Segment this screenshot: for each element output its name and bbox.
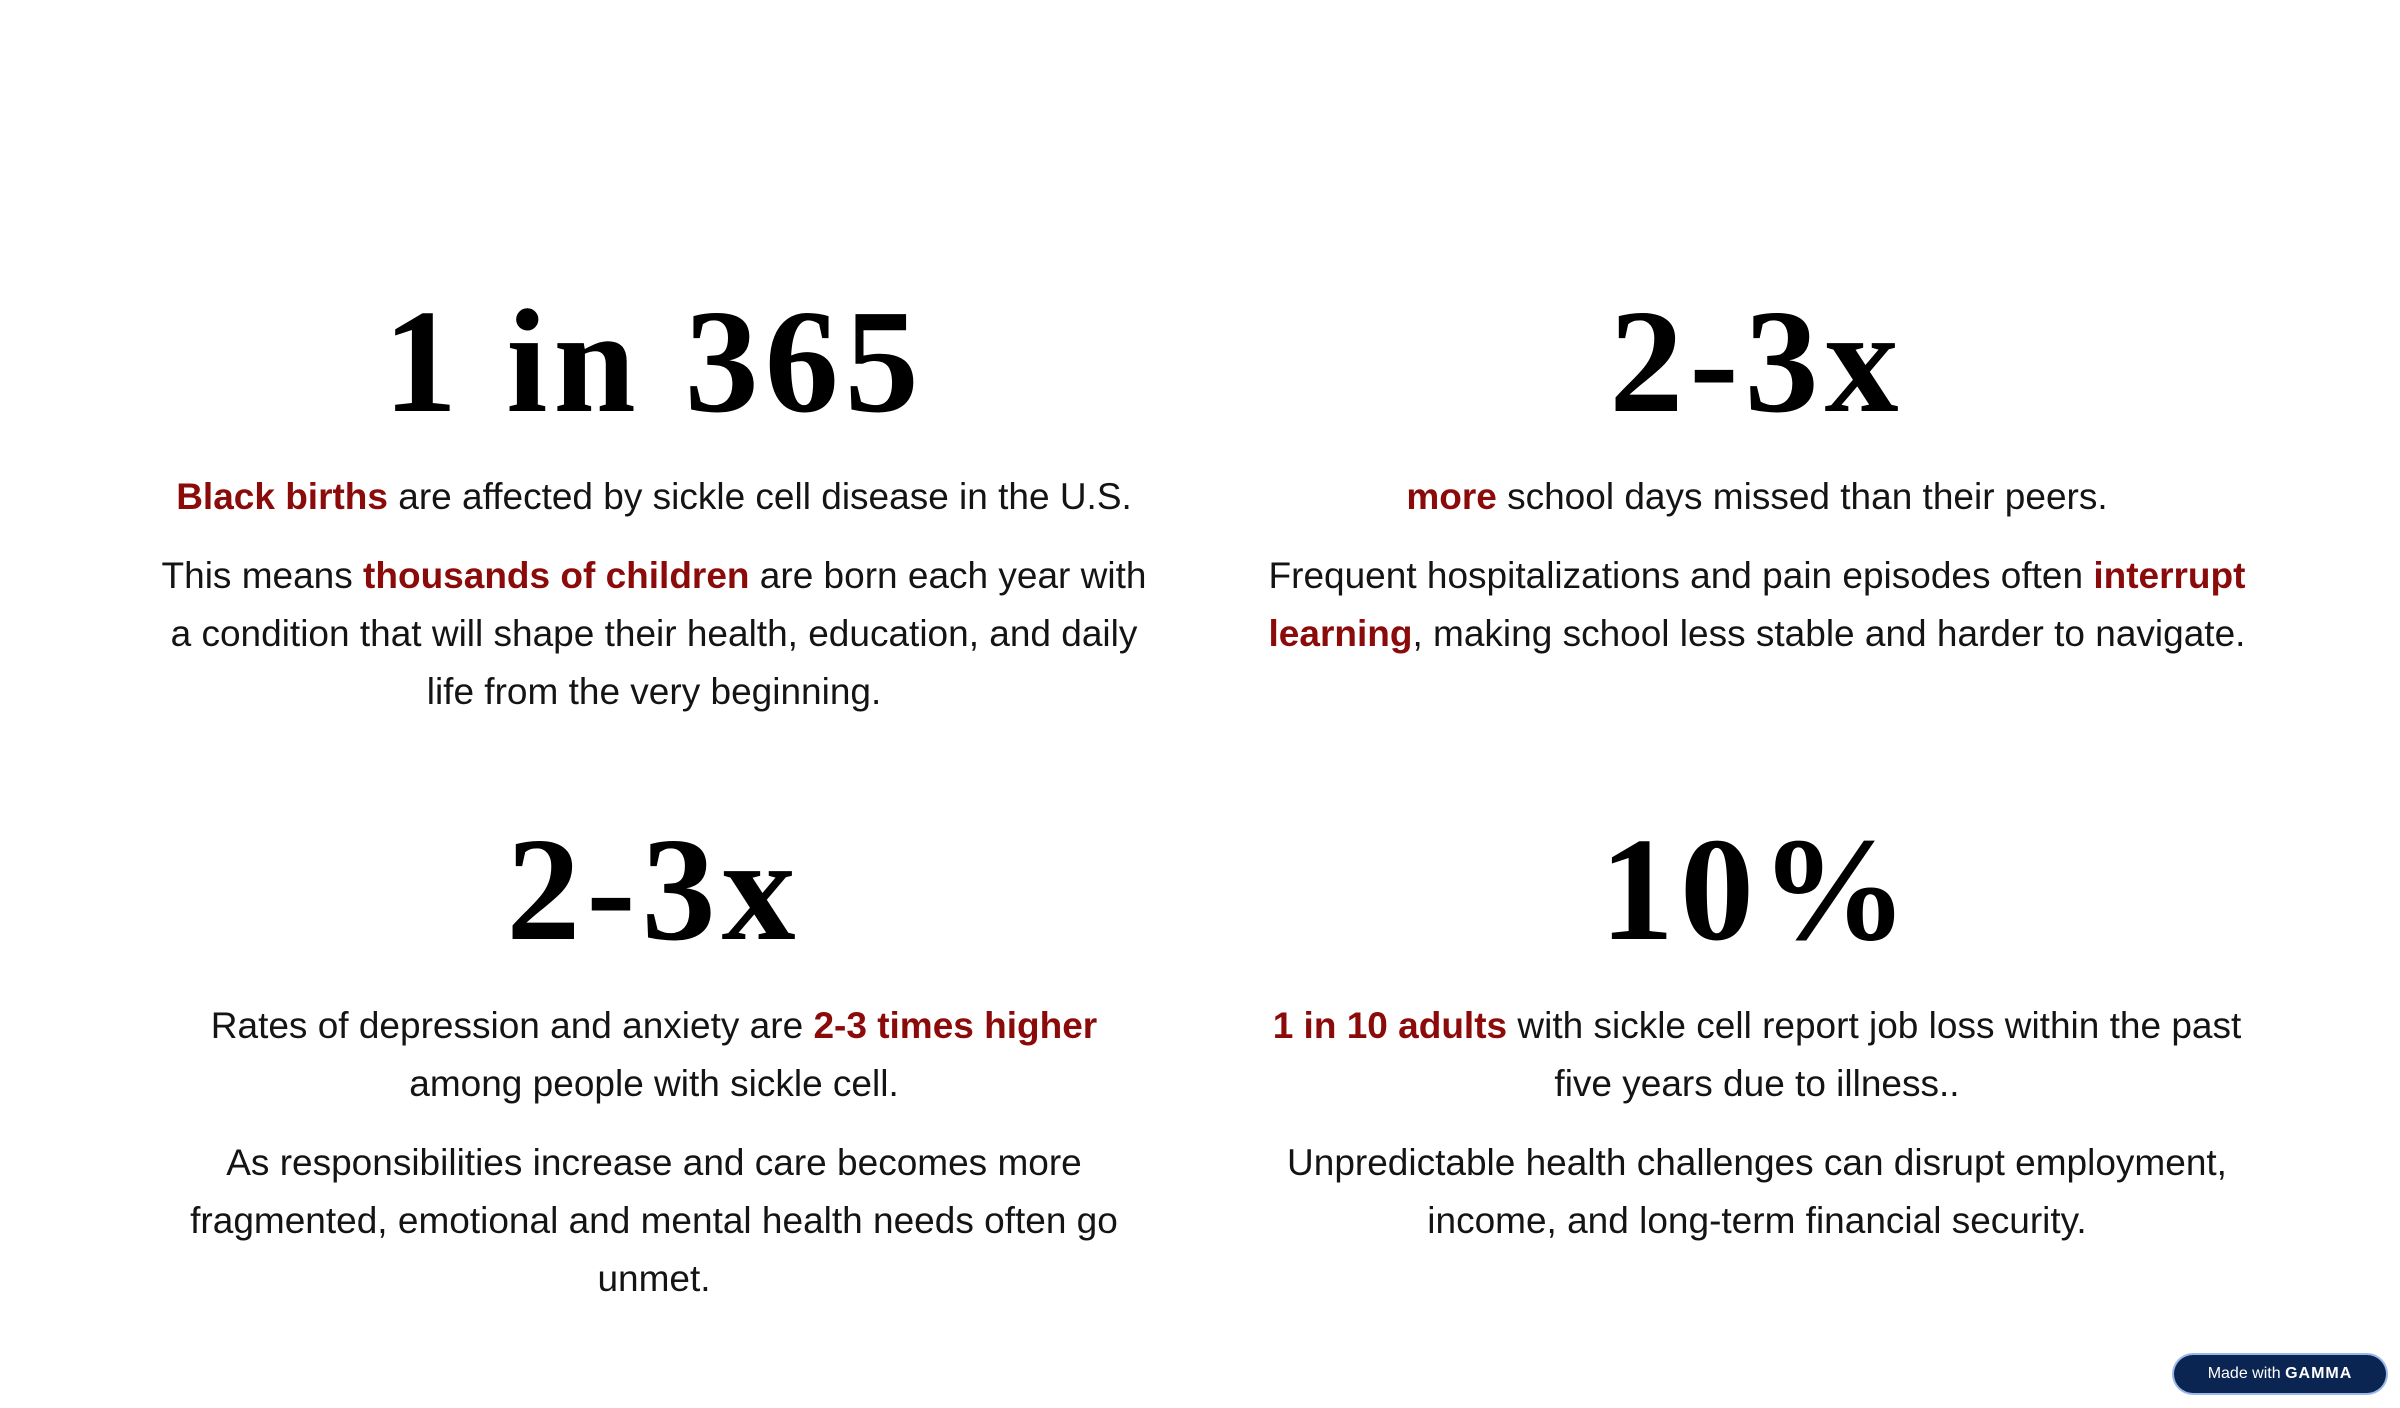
badge: Made with Gamma: Made with GAMMA [2208, 1365, 2352, 1382]
badge: Made with Gamma [2174, 1355, 2386, 1393]
stat: 10%: 10% [1600, 808, 1914, 972]
text block: school days description: more school days missed than their peers. [1406, 476, 2108, 517]
text block: job loss description: Unpredictable health challenges can disrupt employment, [1287, 1142, 2227, 1183]
text block: depression description: Rates of depression and anxiety are 2-3 times higher [211, 1005, 1097, 1046]
text block: job loss description: 1 in 10 adults with sickle cell report job loss within the past [1273, 1005, 2241, 1046]
text block: job loss description: income, and long-term financial security. [1427, 1200, 2087, 1241]
text block: 1 in 365 description: Black births are affected by sickle cell disease in the U.S. [176, 476, 1132, 517]
stat: 2-3x depression: 2-3x [506, 808, 802, 972]
stat: 2-3x school: 2-3x [1609, 280, 1905, 444]
text block: job loss description: five years due to illness.. [1554, 1063, 1960, 1104]
text block: 1 in 365 description [162, 476, 1146, 712]
stat: 1 in 365: 1 in 365 [383, 280, 925, 444]
text block: depression description: unmet. [597, 1258, 711, 1299]
text block: school days description [1269, 476, 2245, 654]
text block: 1 in 365 description: a condition that will shape their health, education, and daily [171, 613, 1137, 654]
text block: depression description: fragmented, emotional and mental health needs often go [190, 1200, 1118, 1241]
text block: job loss description [1273, 1005, 2241, 1241]
text block: 1 in 365 description: life from the very beginning. [427, 671, 881, 712]
text block: depression description [190, 1005, 1118, 1299]
text block: 1 in 365 description: This means thousands of children are born each year with [162, 555, 1146, 596]
text block: school days description: Frequent hospitalizations and pain episodes often interrupt [1269, 555, 2245, 596]
text block: school days description: learning, making school less stable and harder to navigate. [1269, 613, 2245, 654]
text block: depression description: among people with sickle cell. [409, 1063, 899, 1104]
text block: depression description: As responsibilities increase and care becomes more [226, 1142, 1082, 1183]
